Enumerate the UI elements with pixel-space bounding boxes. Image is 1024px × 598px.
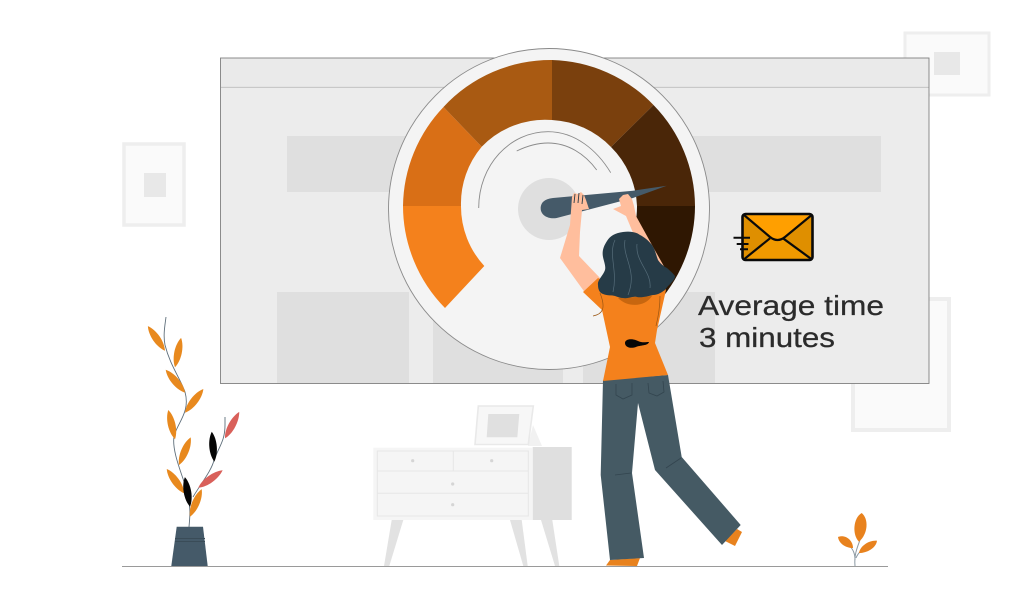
text: average time: 3 minutes [699, 322, 835, 353]
ground line [122, 566, 888, 568]
sideboard furniture [373, 447, 572, 566]
gauge needle [541, 186, 667, 218]
gauge segment 3 [444, 60, 552, 147]
woman: right arm [613, 194, 666, 272]
woman: shirt [583, 265, 668, 381]
sideboard drawers [377, 451, 528, 516]
wall frame: left [124, 144, 184, 225]
sideboard front [373, 448, 533, 520]
woman: shoes [606, 529, 742, 566]
gauge hub [518, 178, 580, 240]
wall frame: top right [905, 33, 989, 95]
woman: left hand fingers [574, 193, 583, 204]
plant stems [164, 317, 225, 527]
small sprout plant [838, 513, 877, 566]
text: average time: Average time [698, 290, 884, 321]
woman: shirt shadow and patch [593, 293, 660, 348]
woman: jeans pockets and folds [615, 381, 681, 475]
plant leaves [145, 324, 242, 518]
woman: jeans [601, 375, 741, 560]
woman figure [560, 192, 742, 566]
text: average time [698, 290, 884, 353]
gauge dial disc [388, 48, 710, 370]
plant pot [171, 527, 208, 566]
browser window panel [220, 58, 929, 384]
icon: envelope [734, 214, 812, 260]
woman: hair strands [612, 240, 650, 295]
speedometer gauge [388, 48, 710, 370]
sideboard side panel [533, 447, 572, 520]
gauge segment 5 [611, 105, 695, 206]
woman: hair [598, 232, 675, 298]
gauge segment 6: darkest [614, 206, 695, 308]
gauge segment 1: orange [403, 206, 484, 308]
gauge segment 2 [403, 107, 482, 206]
woman: left arm [560, 192, 600, 294]
wall frame: bottom right [853, 299, 949, 430]
gauge segment 4 [552, 60, 654, 147]
picture frame on sideboard [475, 406, 542, 446]
potted plant [145, 317, 242, 566]
sideboard knobs [411, 459, 493, 506]
gauge inner arcs [479, 132, 611, 208]
sideboard legs [384, 520, 559, 566]
